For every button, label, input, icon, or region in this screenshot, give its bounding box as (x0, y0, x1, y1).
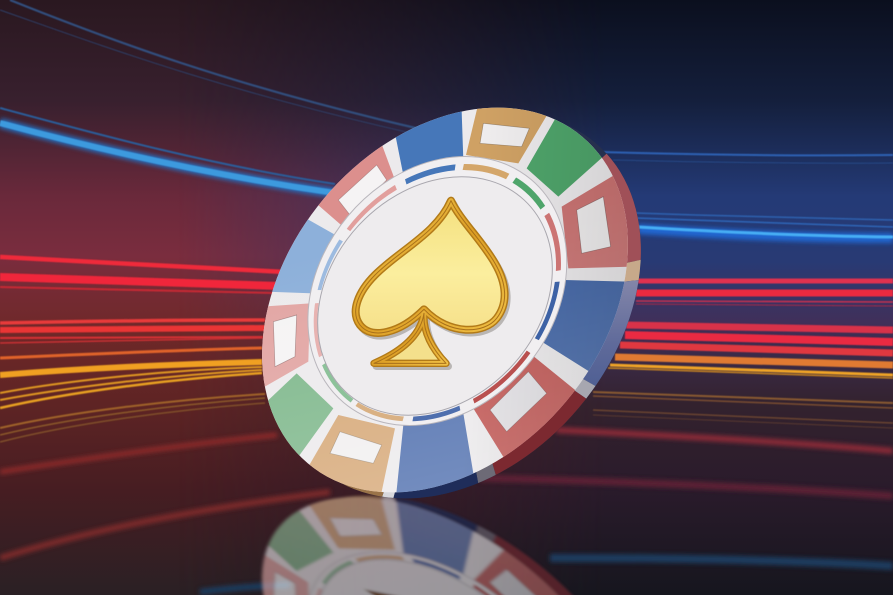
poker chip (187, 12, 835, 595)
light streaks: blue (0, 0, 893, 238)
light streaks: orange (0, 348, 893, 442)
light streaks: red (0, 257, 893, 353)
light streaks: dim floor reflections (0, 430, 893, 592)
chip reflection on floor (260, 494, 574, 595)
icon: gold spade (356, 201, 507, 366)
